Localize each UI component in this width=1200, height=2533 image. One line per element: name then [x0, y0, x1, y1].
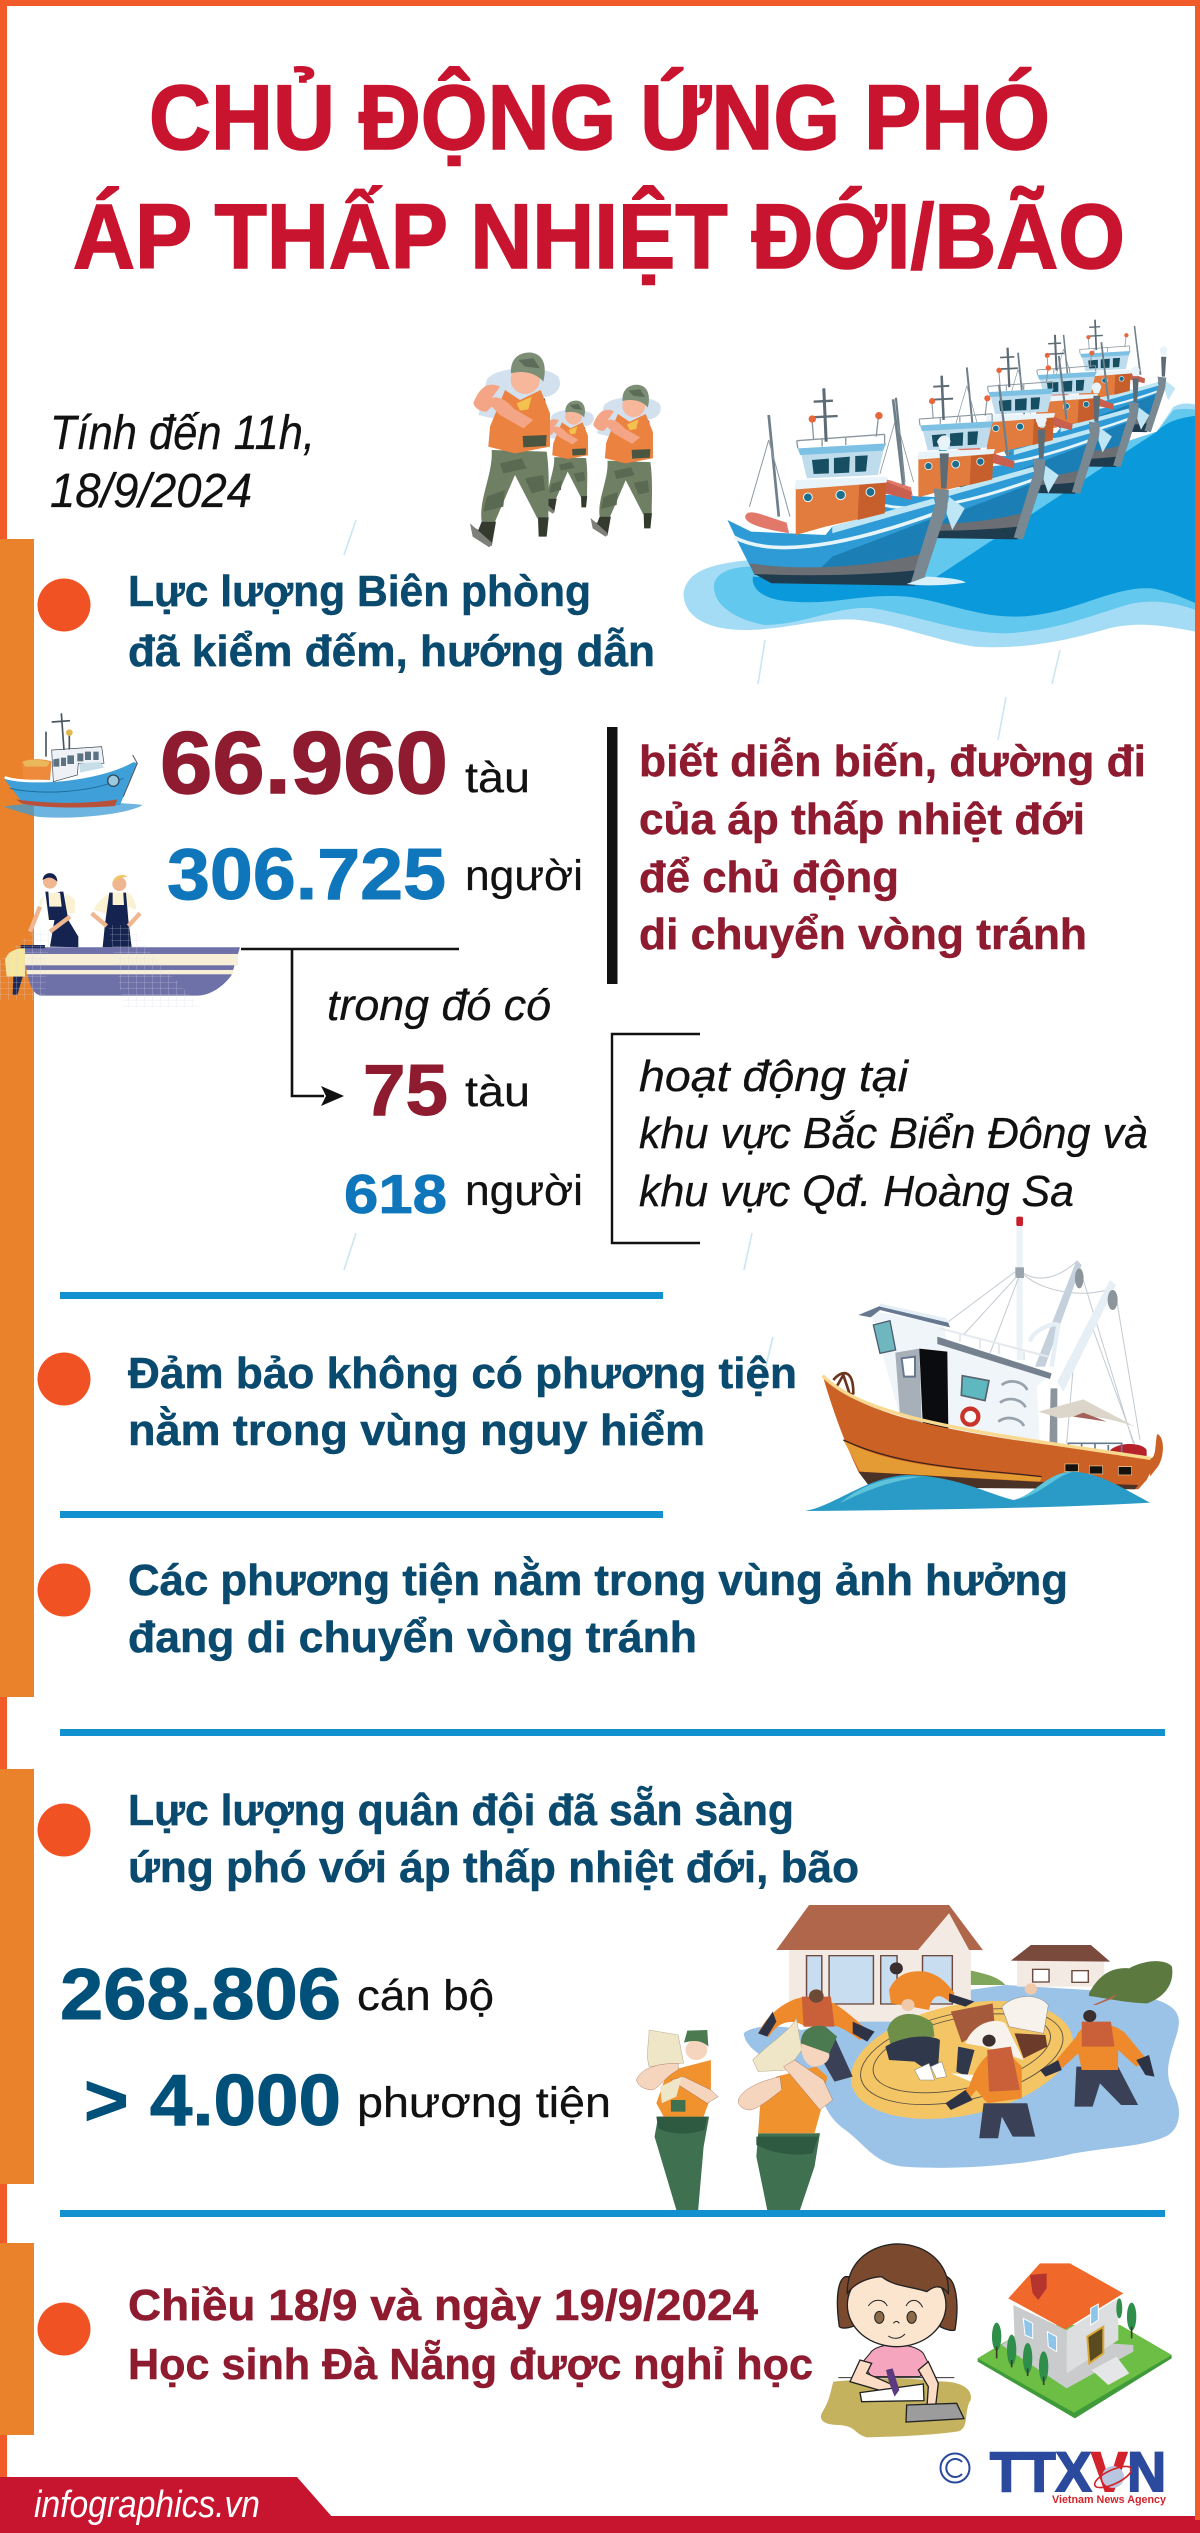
thick separator bar: [607, 727, 618, 984]
logo: TTXVN: TTXVN: [990, 2440, 1166, 2503]
heading: no vehicles in danger: nằm trong vùng nguy hiểm: [128, 1405, 705, 1455]
footer site name: infographics.vn: [34, 2484, 260, 2526]
rain streaks: [344, 520, 1060, 1390]
illustration: fishermen with net on boat: [0, 873, 240, 1007]
heading: border guards: đã kiểm đếm, hướng dẫn: [128, 626, 655, 676]
figure: 268.806 officers: cán bộ: [357, 1972, 494, 2020]
heading: army ready: Lực lượng quân đội đã sẵn sàng: [128, 1784, 794, 1835]
title: [73, 66, 1125, 288]
left orange bar: [0, 539, 34, 2435]
heading: no vehicles in danger: Đảm bảo không có phương tiện: [128, 1349, 797, 1398]
italic area note: khu vực Bắc Biển Đông và: [639, 1109, 1148, 1158]
heading: vehicles moving away: [38, 1555, 1068, 1662]
illustration: small blue boat: [3, 713, 143, 818]
bullet: [38, 1804, 90, 1856]
date note: Tính đến 11h,: [50, 407, 315, 460]
figure: 268.806 officers: 268.806: [60, 1955, 341, 2035]
figure: 306.725 people: người: [465, 852, 583, 900]
red explanation text: để chủ động: [639, 853, 899, 902]
italic area note: khu vực Qđ. Hoàng Sa: [639, 1167, 1074, 1216]
heading: border guards: [38, 567, 655, 676]
right frame edge: [1195, 0, 1200, 2520]
bullet: [38, 1564, 90, 1616]
footer band: [0, 2477, 1200, 2533]
bracket: [612, 1034, 700, 1243]
figure: over 4000 vehicles: [84, 2061, 611, 2141]
bullet: [38, 2302, 90, 2356]
copyright mark: [940, 2454, 970, 2482]
red explanation text: của áp thấp nhiệt đới: [639, 795, 1085, 844]
italic area note: hoạt động tại: [639, 1052, 909, 1101]
figure: 306.725 people: [167, 835, 583, 915]
figure: 66.960 boats: 66.960: [160, 713, 448, 812]
illustration: soldiers carrying bags: [470, 353, 661, 547]
figure: 75 boats: [363, 1051, 530, 1131]
heading: army ready: [38, 1784, 859, 1892]
heading: no vehicles in danger: [38, 1349, 797, 1455]
figure: 306.725 people: 306.725: [167, 835, 446, 915]
subset label: trong đó có: [327, 981, 551, 1030]
figure: over 4000 vehicles: > 4.000: [84, 2061, 341, 2141]
figure: 618 people: 618: [344, 1163, 447, 1225]
heading: vehicles moving away: Các phương tiện nằm trong vùng ảnh hưởng: [128, 1555, 1068, 1605]
illustration: girl studying: [821, 2244, 971, 2437]
red explanation text: biết diễn biến, đường đi: [639, 736, 1146, 786]
figure: over 4000 vehicles: phương tiện: [357, 2079, 611, 2127]
bullet: [38, 578, 90, 632]
figure: 268.806 officers: [60, 1955, 494, 2035]
title: CHỦ ĐỘNG ỨNG PHÓ: [149, 66, 1050, 169]
figure: 66.960 boats: tàu: [465, 754, 530, 802]
heading: army ready: ứng phó với áp thấp nhiệt đới, bão: [128, 1843, 859, 1892]
illustration: house on green plot: [978, 2263, 1172, 2418]
figure: 75 boats: tàu: [465, 1068, 530, 1116]
heading: Da Nang pupils off school: Học sinh Đà Nẵng được nghỉ học: [128, 2338, 813, 2389]
red explanation text: di chuyển vòng tránh: [639, 910, 1087, 959]
figure: 618 people: [344, 1163, 583, 1225]
italic area note: [639, 1052, 1148, 1216]
date note: 18/9/2024: [50, 465, 252, 518]
heading: border guards: Lực lượng Biên phòng: [128, 567, 591, 616]
heading: vehicles moving away: đang di chuyển vòng tránh: [128, 1613, 697, 1662]
illustration: flood rescue with soldiers: [636, 1905, 1179, 2210]
heading: Da Nang pupils off school: [38, 2281, 813, 2389]
connector arrow: [241, 949, 459, 1106]
heading: Da Nang pupils off school: Chiều 18/9 và ngày 19/9/2024: [128, 2281, 759, 2330]
illustration: orange fishing boat: [805, 1217, 1163, 1511]
figure: 618 people: người: [465, 1167, 583, 1215]
date note: [50, 407, 315, 518]
bullet: [38, 1352, 90, 1406]
illustration: fleet of fishing boats on water: [684, 320, 1200, 647]
red explanation text: [639, 736, 1146, 959]
title: ÁP THẤP NHIỆT ĐỚI/BÃO: [73, 185, 1125, 288]
logo: TTXVN: Vietnam News Agency: [1052, 2494, 1167, 2506]
figure: 75 boats: 75: [363, 1051, 448, 1131]
